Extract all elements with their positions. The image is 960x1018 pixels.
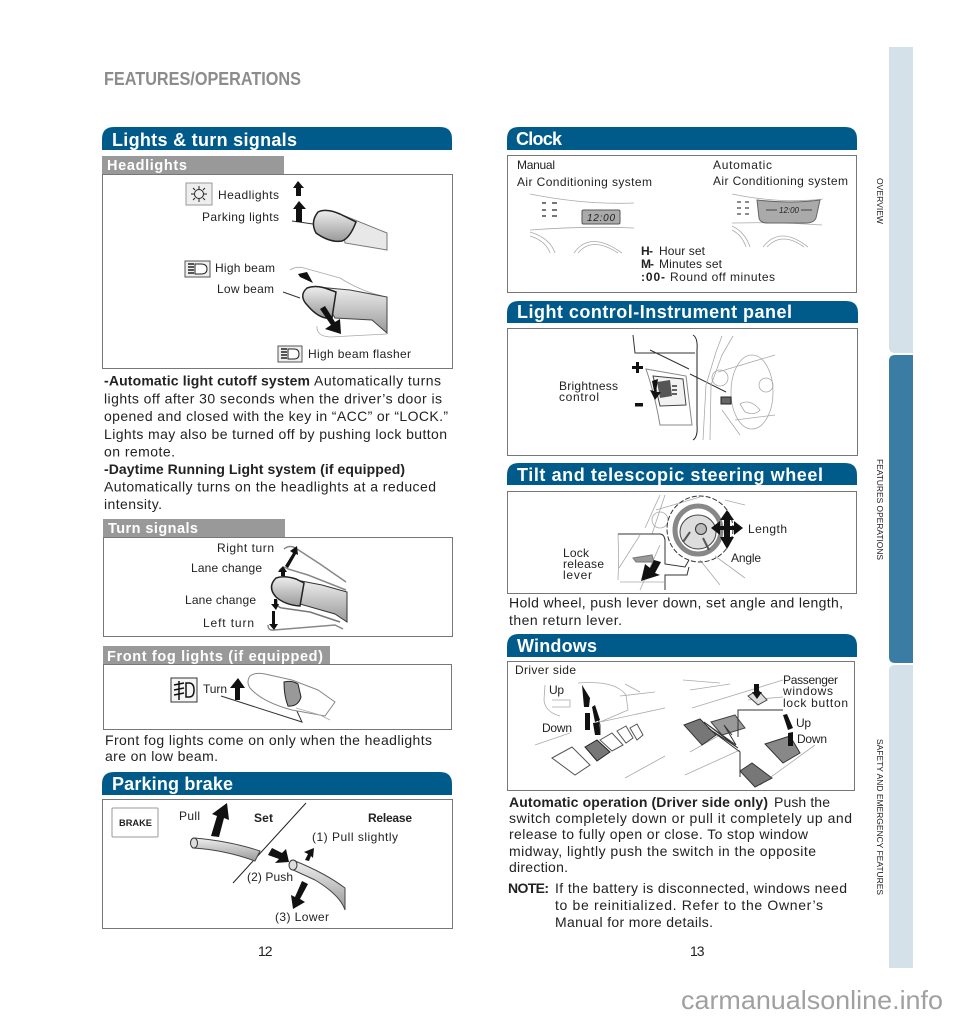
illustration: automatic clock display: 12:00 (779, 206, 800, 215)
illustration: automatic clock display (732, 194, 823, 247)
note: battery disconnected: If the battery is disconnected, windows need (555, 880, 847, 896)
section heading: parking brake (102, 772, 452, 795)
label: parking lights: Parking lights (202, 210, 279, 224)
label: manual air conditioning (517, 158, 652, 189)
illustration: brake lever with arrows (190, 803, 345, 910)
illustration: headlight stalk (292, 181, 387, 250)
label: right turn: Right turn (217, 541, 274, 555)
legend: clock buttons: Minutes set (659, 257, 723, 271)
label: manual air conditioning: Air Conditioning system (517, 175, 652, 189)
page number 12: 12 (258, 943, 273, 959)
panel: light control (508, 328, 858, 456)
label: high beam flasher: High beam flasher (308, 347, 411, 361)
note: battery disconnected: NOTE: (508, 880, 549, 896)
note: battery disconnected (508, 880, 847, 930)
section heading: lights and turn signals: Lights & turn signals (112, 130, 297, 150)
text block: automatic light cutoff and daytime running light: -Daytime Running Light system (if equipped) (104, 461, 405, 477)
sub-heading: front fog lights: Front fog lights (if equipped) (107, 649, 323, 665)
side navigation tabs: OVERVIEW (875, 178, 885, 224)
panel: windows (508, 662, 854, 790)
label: passenger down: Down (797, 732, 827, 746)
illustration: driver side switches (535, 682, 665, 778)
illustration: steering wheel (618, 495, 745, 590)
text block: automatic window operation: switch completely down or pull it completely up and (509, 810, 852, 826)
label: lane change down: Lane change (185, 593, 256, 607)
text block: steering wheel instructions (509, 594, 843, 628)
text block: fog light note: Front fog lights come on only when the headlights (105, 732, 432, 748)
text block: steering wheel instructions: Hold wheel, push lever down, set angle and length, (509, 594, 843, 610)
page number 13: 13 (690, 943, 705, 959)
note: battery disconnected: Manual for more details. (555, 914, 713, 930)
label: passenger windows lock button: lock button (783, 696, 848, 710)
icon: brake warning lamp: BRAKE (119, 818, 152, 828)
icon: minus (635, 403, 643, 406)
text block: automatic light cutoff and daytime running light: lights off after 30 seconds when the driver’s door is (104, 390, 442, 406)
side navigation tabs: SAFETY AND EMERGENCY FEATURES (875, 739, 885, 895)
label: brightness control (559, 379, 618, 404)
label: driver side: Driver side (515, 663, 576, 677)
panel: tilt and telescopic steering wheel (508, 492, 856, 594)
legend: clock buttons: Hour set (659, 244, 706, 258)
text block: automatic window operation: Automatic operation (Driver side only) (509, 794, 768, 810)
side navigation tabs (875, 47, 913, 968)
illustration: manual clock display (530, 194, 634, 253)
label: high beam: High beam (215, 261, 275, 275)
text block: automatic light cutoff and daytime running light: Automatically turns (314, 372, 441, 388)
illustration: fog light stalk (221, 673, 335, 722)
sub-heading: turn signals: Turn signals (108, 521, 198, 537)
label: push: (2) Push (247, 870, 293, 884)
illustration: turn signal stalk (268, 546, 347, 630)
text block: automatic light cutoff and daytime running light (104, 372, 448, 512)
label: passenger windows lock button: Passenger (783, 673, 838, 687)
icon: plus (632, 362, 643, 373)
page title: FEATURES/OPERATIONS (104, 69, 301, 89)
label: automatic air conditioning: Air Conditioning system (713, 174, 848, 188)
section heading: lights and turn signals (102, 127, 452, 150)
text block: automatic window operation: midway, lightly push the switch in the opposite (509, 843, 816, 859)
text block: fog light note (105, 732, 432, 764)
section heading: windows: Windows (517, 636, 597, 656)
label: left turn: Left turn (203, 616, 254, 630)
label: pull: Pull (179, 809, 200, 823)
illustration: beam stalk (283, 267, 387, 337)
illustration: brightness dial and dash (633, 335, 775, 440)
text block: fog light note: are on low beam. (105, 748, 218, 764)
label: length: Length (748, 522, 787, 536)
section heading: clock: Clock (516, 129, 563, 149)
label: release: Release (368, 811, 412, 825)
label: headlights: Headlights (218, 188, 279, 202)
section heading: clock (507, 127, 857, 150)
icon: high beam symbol (185, 261, 210, 277)
text block: automatic window operation: release to fully open or close. To stop window (509, 826, 809, 842)
label: angle: Angle (731, 551, 761, 565)
label: pull slightly: (1) Pull slightly (312, 830, 398, 844)
section heading: parking brake: Parking brake (112, 774, 233, 794)
watermark: carmanualsonline.info (681, 985, 943, 1015)
text block: steering wheel instructions: then return lever. (509, 612, 622, 628)
section heading: tilt and telescopic steering wheel: Tilt and telescopic steering wheel (517, 465, 823, 485)
section heading: windows (507, 634, 857, 657)
note: battery disconnected: to be reinitialized. Refer to the Owner’s (555, 897, 823, 913)
sub-heading: headlights (102, 156, 284, 174)
text block: automatic light cutoff and daytime running light: intensity. (104, 496, 162, 512)
label: passenger windows lock button: windows (782, 684, 833, 698)
sub-heading: headlights: Headlights (107, 158, 187, 174)
text block: automatic light cutoff and daytime running light: Automatically turns on the headlights at a reduced (104, 478, 436, 494)
label: lane change up: Lane change (191, 561, 262, 575)
sub-heading: turn signals (103, 519, 285, 537)
legend: clock buttons: :00- (641, 270, 665, 284)
label: driver down: Down (542, 721, 572, 735)
icon: high beam flasher symbol (278, 346, 302, 362)
text block: automatic light cutoff and daytime running light: opened and closed with the key in “ACC” or “LOCK.” (104, 408, 448, 424)
label: low beam: Low beam (217, 282, 274, 296)
label: passenger up: Up (796, 716, 811, 730)
label: driver up: Up (549, 683, 564, 697)
section heading: light control: Light control-Instrument panel (517, 302, 792, 322)
legend: clock buttons (641, 244, 775, 284)
text block: automatic window operation (509, 794, 852, 875)
icon: headlight symbol (186, 183, 212, 205)
label: lock release lever (563, 546, 604, 582)
legend: clock buttons: Round off minutes (670, 270, 775, 284)
text block: automatic window operation: Push the (774, 794, 830, 810)
panel: clock (508, 156, 856, 292)
icon: brake warning lamp (112, 808, 158, 837)
label: lock release lever: lever (563, 568, 592, 582)
illustration: manual clock display: 12:00 (587, 213, 615, 224)
panel: front fog lights (104, 664, 452, 730)
label: lock release lever: Lock (563, 546, 590, 560)
label: turn: Turn (203, 682, 227, 696)
text block: automatic window operation: direction. (509, 859, 568, 875)
label: automatic air conditioning (713, 158, 848, 188)
text block: automatic light cutoff and daytime running light: on remote. (104, 444, 175, 460)
illustration: passenger side switches (683, 680, 815, 787)
panel: turn signals (104, 538, 452, 636)
text block: automatic light cutoff and daytime running light: -Automatic light cutoff system (104, 372, 310, 388)
icon: fog light symbol (171, 678, 197, 702)
label: manual air conditioning: Manual (517, 158, 555, 172)
label: set: Set (254, 811, 273, 825)
label: lower: (3) Lower (275, 910, 329, 924)
legend: clock buttons: M- (641, 257, 654, 271)
text block: automatic light cutoff and daytime running light: Lights may also be turned off by pushing lock button (104, 426, 447, 442)
label: brightness control: Brightness (559, 379, 618, 393)
label: lock release lever: release (563, 557, 604, 571)
legend: clock buttons: H- (641, 244, 653, 258)
label: automatic air conditioning: Automatic (713, 158, 772, 172)
label: brightness control: control (559, 390, 599, 404)
panel: parking brake (102, 800, 452, 928)
label: passenger windows lock button (782, 673, 848, 710)
side navigation tabs: FEATURES OPERATIONS (875, 459, 885, 560)
panel: headlights (102, 174, 452, 368)
